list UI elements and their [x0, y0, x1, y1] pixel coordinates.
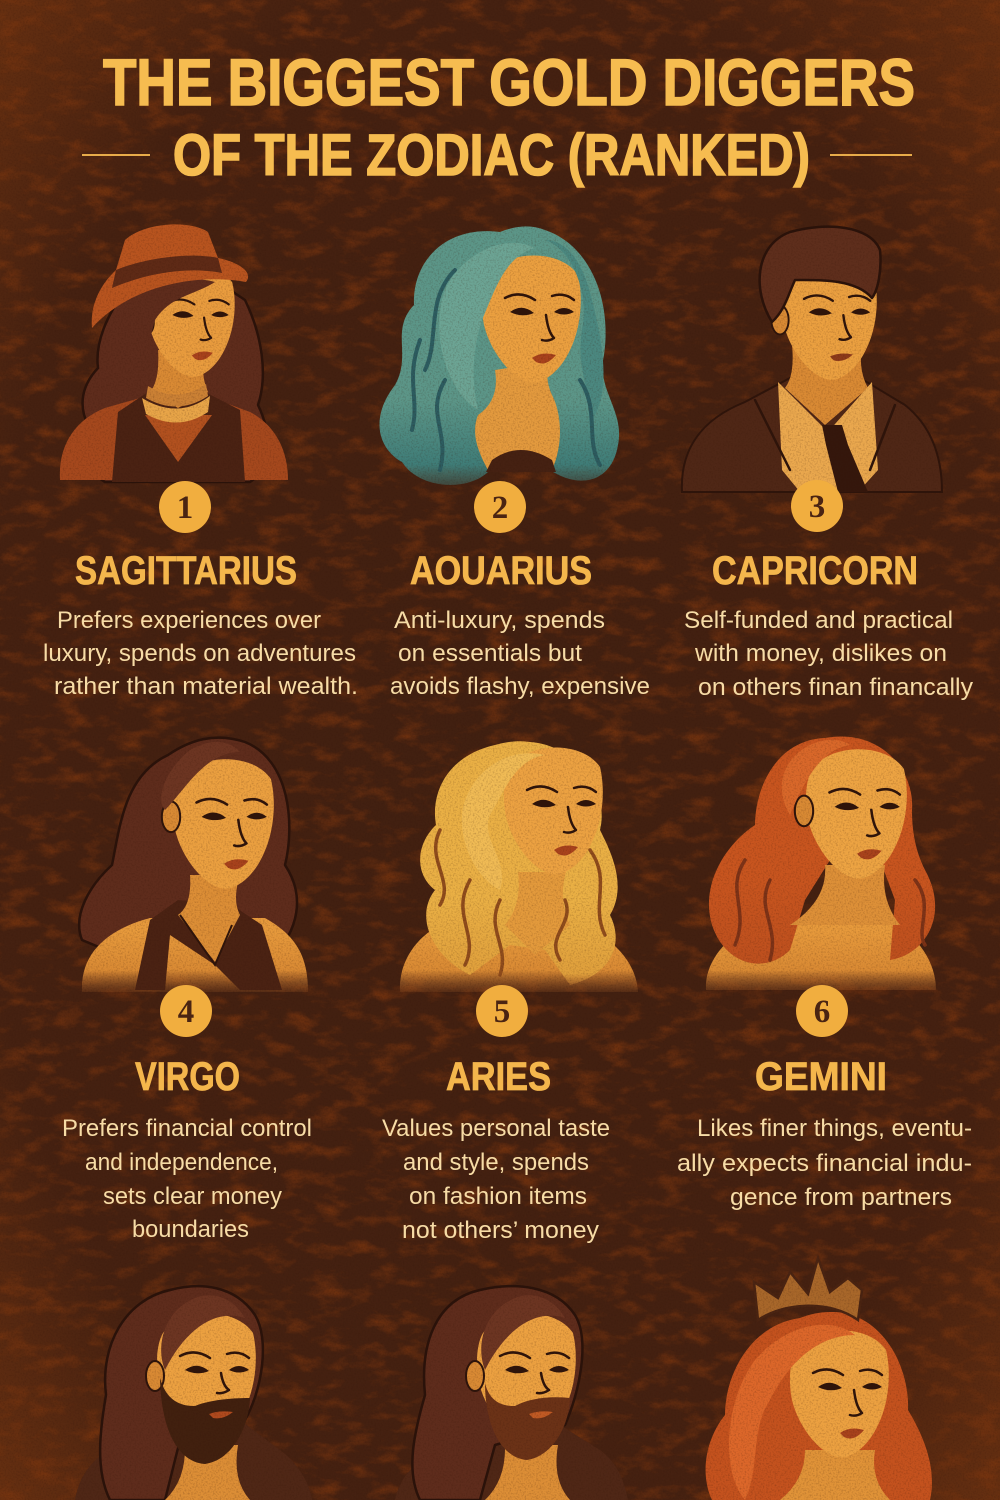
description: Virgo: sets clear money [103, 1183, 282, 1210]
heading: Virgo: VIRGO [135, 1055, 240, 1099]
heading: Capricorn: CAPRICORN [712, 549, 918, 593]
description: Sagittarius: Prefers experiences over [57, 607, 321, 634]
description: Gemini [677, 1115, 972, 1211]
rank badge 1: 1 [177, 490, 193, 526]
rank badge 2 [474, 481, 526, 533]
rank badge 3: 3 [809, 489, 825, 525]
description: Aries: on fashion items [409, 1183, 587, 1210]
heading: Sagittarius: SAGITTARIUS [75, 549, 297, 593]
portrait 5: Aries [400, 741, 638, 992]
description: Virgo: and independence, [85, 1149, 278, 1176]
portrait 6: Gemini [706, 737, 936, 990]
rank badge 6 [796, 985, 848, 1037]
description: Aquarius: Anti-luxury, spends [394, 607, 605, 634]
description: Sagittarius: luxury, spends on adventures [43, 640, 356, 667]
title [82, 45, 915, 188]
rank badge 5: 5 [494, 994, 510, 1030]
portrait 9: crowned queen [706, 1258, 932, 1500]
rank badge 3 [791, 480, 843, 532]
rank badge 6: 6 [814, 994, 830, 1030]
description: Capricorn: on others finan financally [698, 674, 973, 701]
description: Aries: not others’ money [402, 1217, 599, 1244]
description: Gemini: gence from partners [730, 1184, 952, 1211]
description: Sagittarius [43, 607, 358, 700]
rank badge 4 [160, 985, 212, 1037]
description: Aquarius: on essentials but [398, 640, 582, 667]
rank badge 5 [476, 985, 528, 1037]
title: OF THE ZODIAC (RANKED) [173, 123, 810, 188]
rank badge 1 [159, 481, 211, 533]
description: Gemini: ally expects financial indu- [677, 1150, 972, 1177]
portrait 3: Capricorn [682, 227, 942, 492]
description: Capricorn: Self-funded and practical [684, 607, 953, 634]
description: Aries [382, 1115, 610, 1244]
heading: Aquarius: AOUARIUS [410, 549, 592, 593]
portrait 1: Sagittarius [60, 224, 288, 482]
description: Aquarius: avoids flashy, expensive [390, 673, 650, 700]
heading: Gemini: GEMINI [755, 1055, 887, 1099]
description: Capricorn: with money, dislikes on [694, 640, 947, 667]
description: Aquarius [390, 607, 650, 700]
description: Aries: and style, spends [403, 1149, 589, 1176]
rank badge 4: 4 [178, 994, 194, 1030]
heading: Aries: ARIES [446, 1055, 551, 1099]
description: Virgo: Prefers financial control [62, 1115, 312, 1142]
description: Sagittarius: rather than material wealth. [54, 673, 358, 700]
rank badge 2: 2 [492, 490, 508, 526]
description: Gemini: Likes finer things, eventu- [697, 1115, 972, 1142]
portrait 2: Aquarius [379, 226, 619, 485]
description: Virgo [62, 1115, 312, 1243]
portrait 8: bearded man [395, 1286, 628, 1500]
description: Virgo: boundaries [132, 1216, 249, 1243]
portrait 7: bearded man [75, 1286, 312, 1500]
portrait 4: Virgo [79, 738, 308, 992]
description: Aries: Values personal taste [382, 1115, 610, 1142]
description: Capricorn [684, 607, 973, 701]
